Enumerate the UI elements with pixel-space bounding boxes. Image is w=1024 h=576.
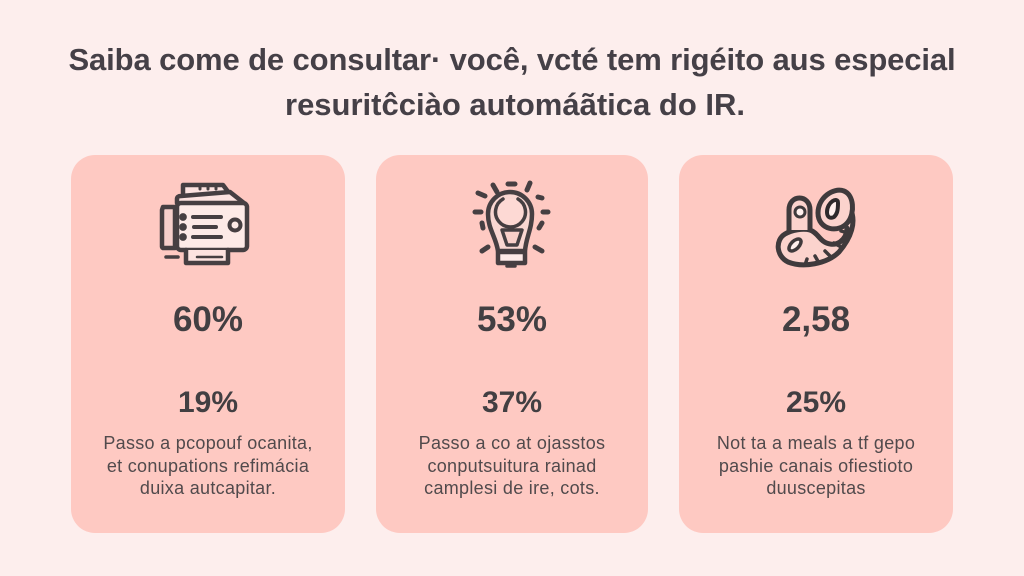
description: et conupations refimácia [107,456,309,476]
title [68,42,956,122]
description: Passo a pcopouf ocanita, [103,433,313,453]
metric: primary value: 53% [477,300,547,339]
metric: primary value: 60% [173,300,243,339]
description [419,433,605,498]
metric: primary value: 2,58 [782,300,850,339]
icon: light bulb [472,180,550,268]
title: resuritĉciào automáãtica do IR. [285,87,745,122]
metric: secondary value: 19% [178,386,238,419]
description: camplesi de ire, cots. [424,478,600,498]
icon: document card [160,182,250,266]
description: Passo a co at ojasstos [419,433,605,453]
metric: secondary value: 37% [482,386,542,419]
metric: secondary value: 25% [786,386,846,419]
panel: card 3 [679,155,953,533]
description [103,433,313,498]
description: pashie canais ofiestioto [719,456,913,476]
panel: card 1 [71,155,345,533]
icon: abstract capsule shapes [776,188,856,268]
description [717,433,915,498]
description: conputsuitura rainad [427,456,597,476]
title: Saiba come de consultar· você, vcté tem rigéito aus especial [68,42,956,77]
panel: card 2 [376,155,648,533]
description: duuscepitas [766,478,866,498]
description: Not ta a meals a tf gepo [717,433,915,453]
description: duixa autcapitar. [140,478,276,498]
